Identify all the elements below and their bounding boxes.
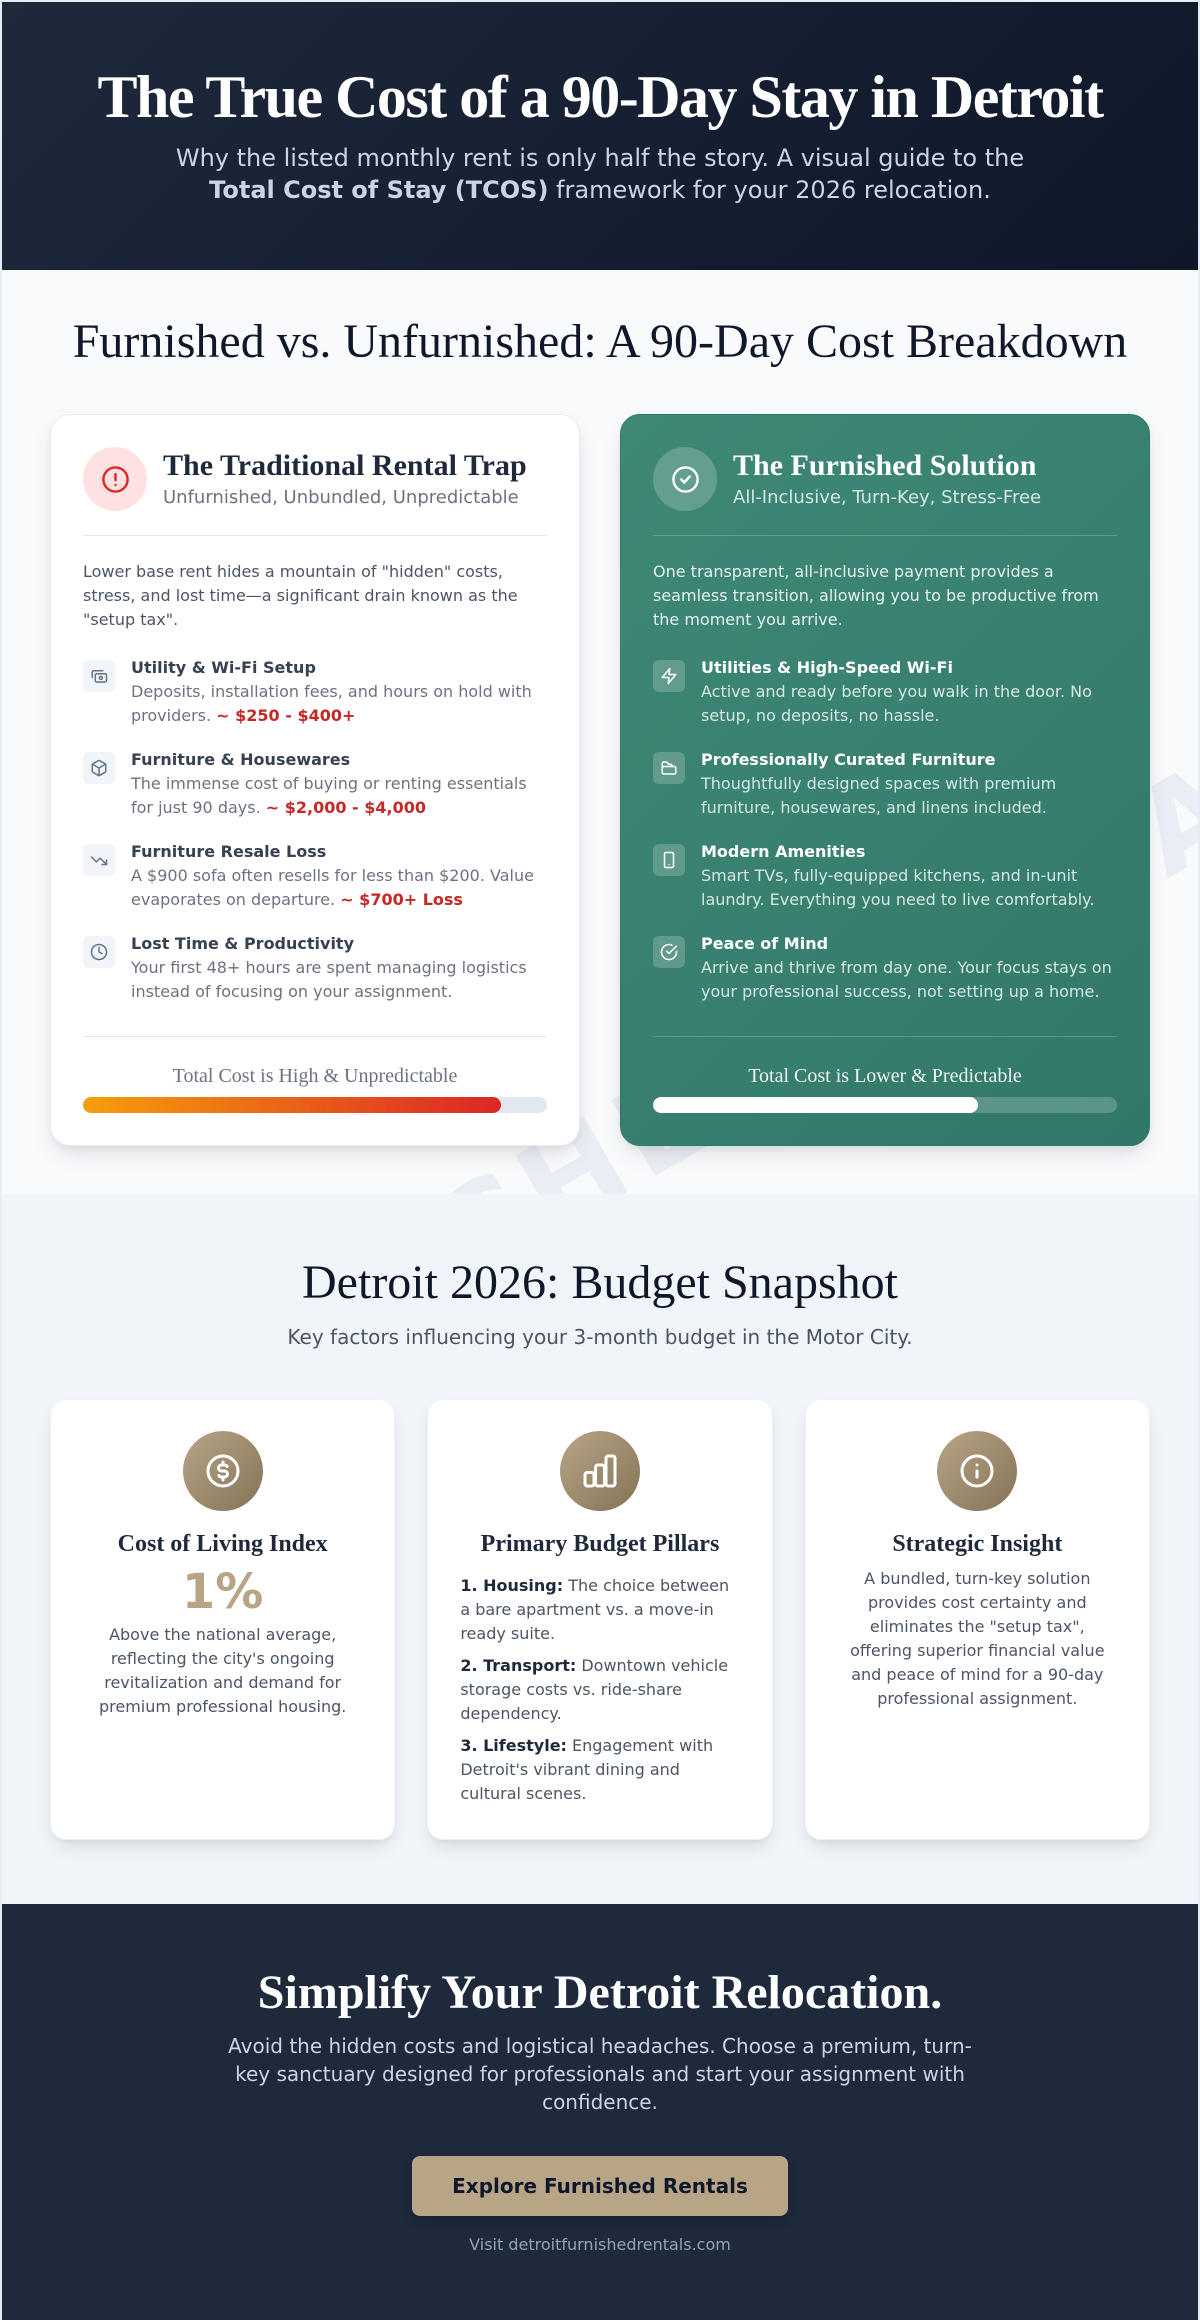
item: peace of mind: your professional success, not setting up a home. bbox=[701, 982, 1099, 1001]
icon: smartphone bbox=[653, 844, 685, 876]
stat: 1% bbox=[182, 1564, 263, 1620]
section: furnished vs unfurnished bbox=[2, 270, 1198, 1194]
cta button: Explore Furnished Rentals bbox=[452, 2174, 748, 2198]
intro text: One transparent, all-inclusive payment provides a bbox=[653, 562, 1054, 581]
item: lost time: Your first 48+ hours are spent managing logistics bbox=[131, 958, 527, 977]
intro text: Lower base rent hides a mountain of "hidden" costs, bbox=[83, 562, 503, 581]
section: budget snapshot bbox=[2, 1194, 1198, 1904]
section subtitle: Key factors influencing your 3-month budget in the Motor City. bbox=[287, 1325, 913, 1349]
pillar list: ready suite. bbox=[460, 1624, 555, 1643]
card text: and peace of mind for a 90-day bbox=[851, 1665, 1103, 1684]
pillar list: a bare apartment vs. a move-in bbox=[460, 1600, 714, 1619]
item: resale loss: Furniture Resale Loss bbox=[131, 842, 326, 861]
card title: Strategic Insight bbox=[892, 1531, 1062, 1557]
cta text: key sanctuary designed for professionals and start your assignment with bbox=[235, 2062, 965, 2086]
icon: lightning bbox=[653, 660, 685, 692]
pillar list: storage costs vs. ride-share bbox=[460, 1680, 682, 1699]
intro text: stress, and lost time—a significant drain known as the bbox=[83, 586, 518, 605]
website link: Visit detroitfurnishedrentals.com bbox=[469, 2235, 731, 2254]
header banner bbox=[2, 2, 1198, 270]
card: budget pillars bbox=[427, 1399, 773, 1840]
icon: info bbox=[937, 1431, 1017, 1511]
card text: reflecting the city's ongoing bbox=[111, 1649, 334, 1668]
panel title: The Furnished Solution bbox=[733, 449, 1036, 482]
card title: Cost of Living Index bbox=[118, 1531, 328, 1557]
panel title bbox=[733, 449, 1041, 508]
card title: Primary Budget Pillars bbox=[481, 1531, 719, 1557]
item: utility setup: Deposits, installation fees, and hours on hold with bbox=[131, 682, 532, 701]
item: utilities bbox=[653, 658, 1092, 725]
cta text bbox=[228, 2034, 972, 2114]
item: amenities: Smart TVs, fully-equipped kitchens, and in-unit bbox=[701, 866, 1077, 885]
item: curated furniture: Professionally Curated Furniture bbox=[701, 750, 996, 769]
pillar list: 3. Lifestyle: Engagement with bbox=[460, 1736, 713, 1755]
item: peace of mind: Arrive and thrive from day one. Your focus stays on bbox=[701, 958, 1112, 977]
item: curated furniture: furniture, housewares, and linens included. bbox=[701, 798, 1047, 817]
icon: bar chart bbox=[560, 1431, 640, 1511]
item: utility setup: providers. ~ $250 - $400+ bbox=[131, 706, 355, 725]
card text: eliminates the "setup tax", bbox=[870, 1617, 1085, 1636]
main title: The True Cost of a 90-Day Stay in Detroit bbox=[97, 64, 1103, 130]
subtitle bbox=[176, 144, 1024, 204]
item: resale loss bbox=[83, 842, 534, 909]
icon: dollar bbox=[183, 1431, 263, 1511]
card text bbox=[850, 1569, 1105, 1708]
item: furniture: The immense cost of buying or renting essentials bbox=[131, 774, 527, 793]
item: lost time: instead of focusing on your assignment. bbox=[131, 982, 452, 1001]
icon: alert circle bbox=[83, 447, 147, 511]
item: amenities: Modern Amenities bbox=[701, 842, 865, 861]
panel title: All-Inclusive, Turn-Key, Stress-Free bbox=[733, 487, 1041, 508]
cta text: confidence. bbox=[542, 2090, 658, 2114]
item: furniture bbox=[83, 750, 527, 817]
subtitle: Total Cost of Stay (TCOS) framework for your 2026 relocation. bbox=[209, 176, 991, 204]
card text: revitalization and demand for bbox=[104, 1673, 341, 1692]
pillar list: 1. Housing: The choice between bbox=[460, 1576, 729, 1595]
pillar list: 2. Transport: Downtown vehicle bbox=[460, 1656, 728, 1675]
cost meter: Total Cost is High & Unpredictable bbox=[173, 1065, 457, 1087]
card: cost of living bbox=[50, 1399, 395, 1840]
item: curated furniture: Thoughtfully designed spaces with premium bbox=[701, 774, 1056, 793]
card: strategic insight bbox=[805, 1399, 1150, 1840]
panel: traditional rental trap bbox=[50, 414, 580, 1146]
item: peace of mind: Peace of Mind bbox=[701, 934, 828, 953]
item: furniture: for just 90 days. ~ $2,000 - $4,000 bbox=[131, 798, 426, 817]
card text: offering superior financial value bbox=[850, 1641, 1105, 1660]
subtitle: Why the listed monthly rent is only half the story. A visual guide to the bbox=[176, 144, 1024, 172]
pillar list: Detroit's vibrant dining and bbox=[460, 1760, 680, 1779]
card text bbox=[99, 1625, 346, 1716]
icon: circle check bbox=[653, 936, 685, 968]
item: amenities bbox=[653, 842, 1094, 909]
item: utilities: Active and ready before you walk in the door. No bbox=[701, 682, 1092, 701]
panel header bbox=[83, 447, 547, 536]
icon: trending down bbox=[83, 844, 115, 876]
card text: professional assignment. bbox=[877, 1689, 1077, 1708]
cost meter: Total Cost is Lower & Predictable bbox=[748, 1065, 1022, 1087]
panel title: The Traditional Rental Trap bbox=[163, 449, 527, 482]
section heading: Furnished vs. Unfurnished: A 90-Day Cost Breakdown bbox=[73, 315, 1127, 368]
section: call to action bbox=[2, 1904, 1198, 2320]
cta button bbox=[412, 2156, 788, 2216]
cta heading: Simplify Your Detroit Relocation. bbox=[258, 1966, 942, 2019]
item: lost time: Lost Time & Productivity bbox=[131, 934, 354, 953]
panel: furnished solution bbox=[620, 414, 1150, 1146]
item: utilities: setup, no deposits, no hassle. bbox=[701, 706, 939, 725]
item: resale loss: A $900 sofa often resells for less than $200. Value bbox=[131, 866, 534, 885]
pillar list: dependency. bbox=[460, 1704, 562, 1723]
icon: folder bbox=[653, 752, 685, 784]
section heading: Detroit 2026: Budget Snapshot bbox=[302, 1256, 898, 1309]
item: peace of mind bbox=[653, 934, 1112, 1001]
panel header bbox=[653, 447, 1117, 536]
pillar list bbox=[460, 1576, 729, 1803]
intro text bbox=[83, 562, 518, 629]
item: utilities: Utilities & High-Speed Wi-Fi bbox=[701, 658, 953, 677]
item: curated furniture bbox=[653, 750, 1056, 817]
watermark bbox=[410, 732, 1198, 1194]
icon: check circle bbox=[653, 447, 717, 511]
cta text: Avoid the hidden costs and logistical headaches. Choose a premium, turn- bbox=[228, 2034, 972, 2058]
intro text: "setup tax". bbox=[83, 610, 178, 629]
card text: provides cost certainty and bbox=[868, 1593, 1087, 1612]
item: furniture: Furniture & Housewares bbox=[131, 750, 350, 769]
panel title bbox=[163, 449, 527, 508]
pillar list: cultural scenes. bbox=[460, 1784, 586, 1803]
item: amenities: laundry. Everything you need to live comfortably. bbox=[701, 890, 1094, 909]
icon: banknotes bbox=[83, 660, 115, 692]
card text: premium professional housing. bbox=[99, 1697, 346, 1716]
item: lost time bbox=[83, 934, 527, 1001]
intro text bbox=[653, 562, 1099, 629]
panel title: Unfurnished, Unbundled, Unpredictable bbox=[163, 487, 519, 508]
item: utility setup bbox=[83, 658, 532, 725]
intro text: seamless transition, allowing you to be productive from bbox=[653, 586, 1099, 605]
icon: box bbox=[83, 752, 115, 784]
cost meter bbox=[653, 1036, 1117, 1113]
item: resale loss: evaporates on departure. ~ $700+ Loss bbox=[131, 890, 463, 909]
intro text: the moment you arrive. bbox=[653, 610, 843, 629]
cost meter bbox=[83, 1036, 547, 1113]
card text: Above the national average, bbox=[109, 1625, 336, 1644]
card text: A bundled, turn-key solution bbox=[864, 1569, 1090, 1588]
icon: clock bbox=[83, 936, 115, 968]
item: utility setup: Utility & Wi-Fi Setup bbox=[131, 658, 316, 677]
